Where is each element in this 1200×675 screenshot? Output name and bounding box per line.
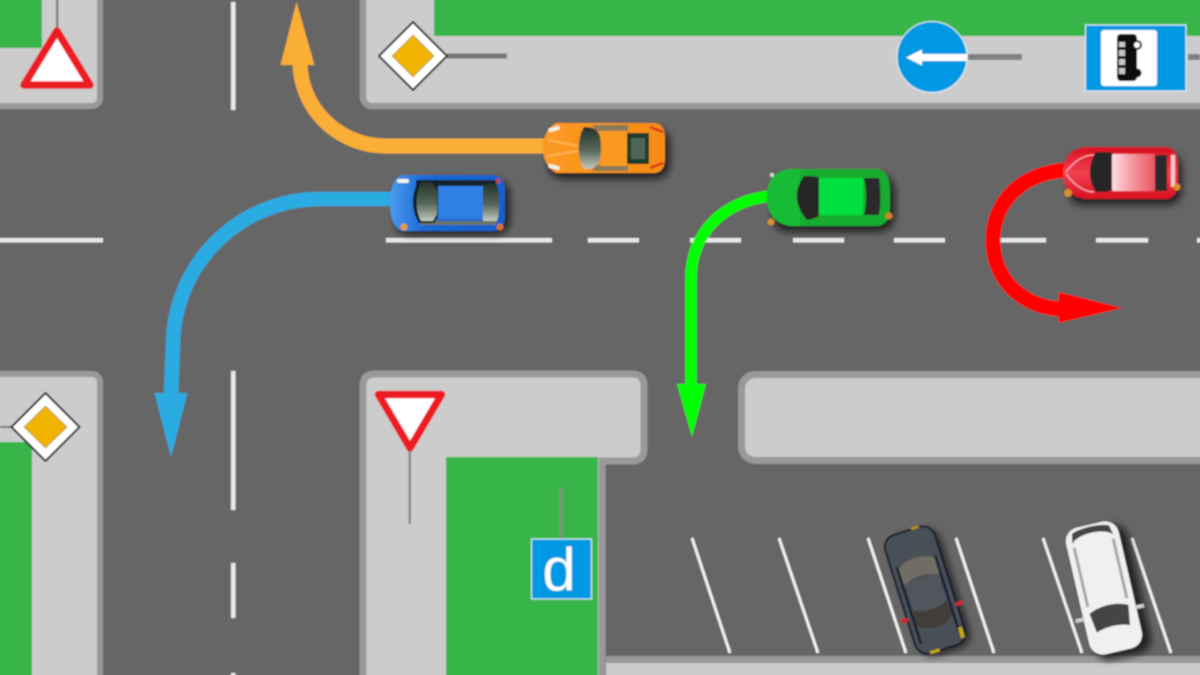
icon: bus xyxy=(1117,34,1142,81)
arrow: orange turn left up xyxy=(280,2,550,146)
car: red xyxy=(1063,147,1182,205)
block: right island xyxy=(742,374,1200,460)
car: green xyxy=(767,169,895,232)
car: blue xyxy=(390,175,510,235)
block: top-left sidewalk xyxy=(0,0,100,106)
sign: parking xyxy=(532,488,592,603)
sign: bus stop xyxy=(1086,25,1200,91)
sign: one-way left circle xyxy=(897,22,1022,92)
arrow: blue turn left down xyxy=(154,199,395,457)
block: top-right sidewalk xyxy=(363,0,1200,106)
sign: priority road left xyxy=(0,393,80,461)
sign: priority road top xyxy=(379,22,507,90)
parking bay lines xyxy=(692,538,1171,653)
block: bottom-middle sidewalk xyxy=(363,374,644,675)
sign: give way ahead triangle xyxy=(24,0,90,85)
car: white parked xyxy=(1055,517,1154,666)
arrow: green turn down xyxy=(677,196,772,437)
block: bottom-left sidewalk xyxy=(0,374,100,675)
car: orange xyxy=(543,123,670,179)
parking lot lower kerb xyxy=(606,656,1200,675)
arrow: red u-turn xyxy=(993,170,1122,323)
sign: give way xyxy=(378,394,442,524)
sign: parking: d xyxy=(542,536,576,603)
car: dark grey parked xyxy=(875,519,975,663)
